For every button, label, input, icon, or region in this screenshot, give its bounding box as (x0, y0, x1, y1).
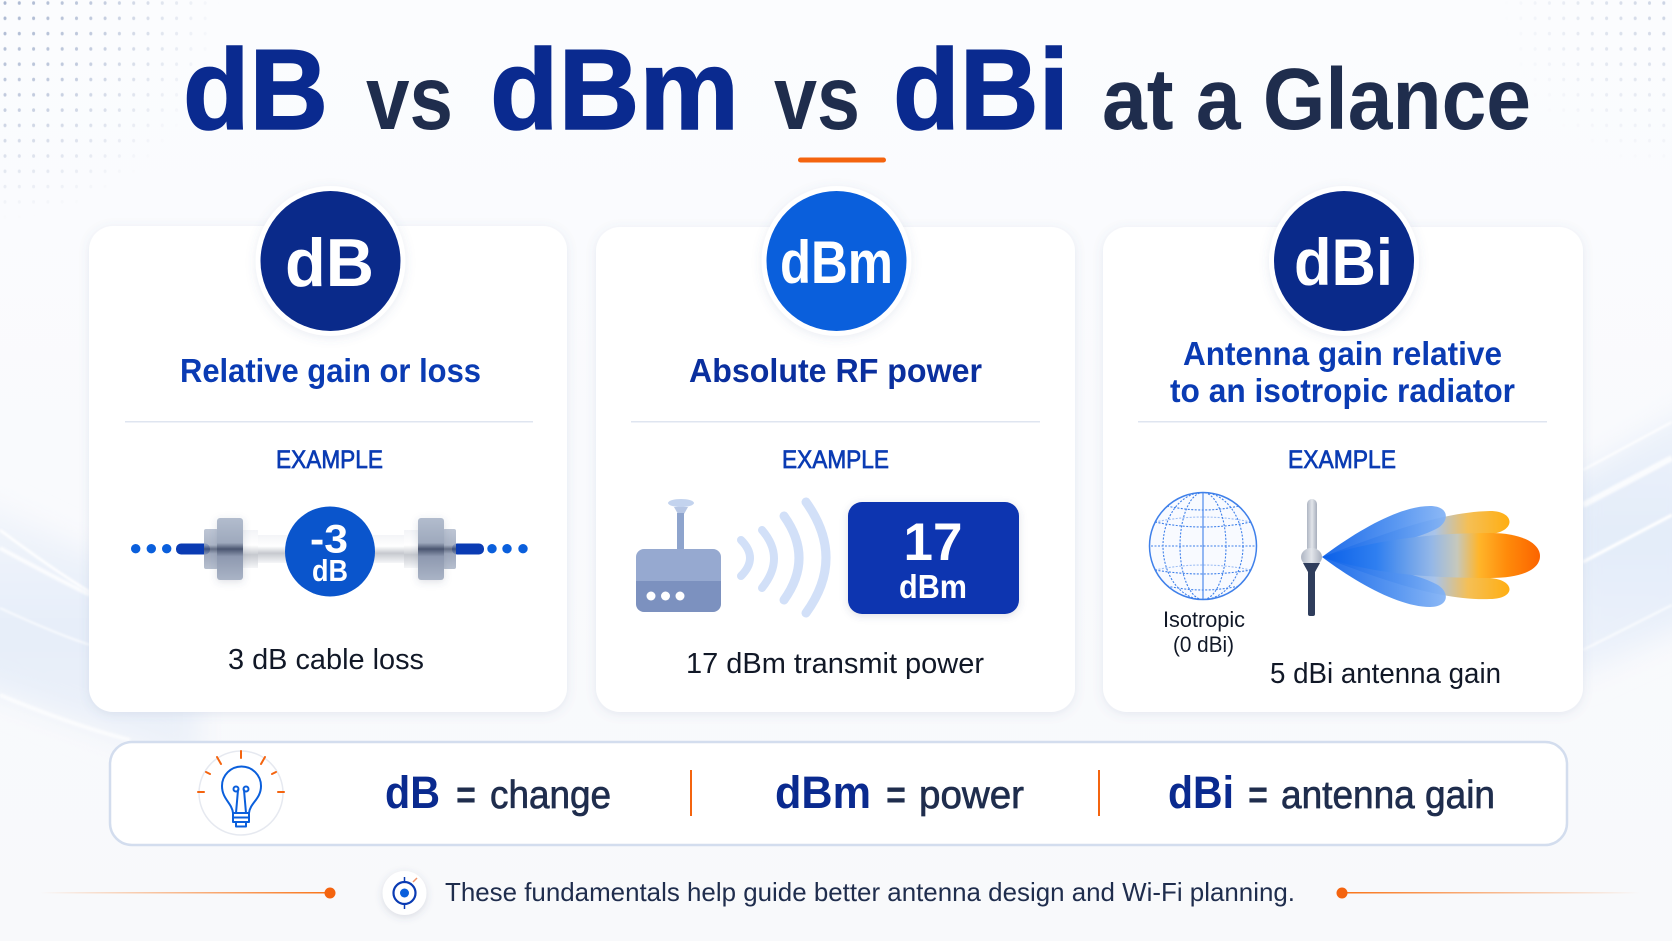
footer accent: left line (40, 888, 336, 898)
background (0, 1, 1672, 740)
badge: dBi: dBi (1294, 225, 1393, 299)
title (183, 27, 1531, 154)
label: isotropic: (0 dBi) (1173, 632, 1234, 657)
badge: dBi (1269, 186, 1419, 336)
formula: dBm = power (775, 767, 1024, 818)
formula: dBi = antenna gain: = (1248, 773, 1268, 817)
icon: isotropic sphere (1150, 492, 1256, 600)
formula: dBi = antenna gain (1168, 767, 1495, 818)
illustration: coax cable with -3 dB attenuator: -3 (310, 518, 348, 562)
formula: dBi = antenna gain: antenna gain (1281, 774, 1495, 817)
title: dBi (893, 27, 1069, 154)
panel: dBi card (1103, 186, 1583, 712)
title: at a Glance (1102, 51, 1531, 148)
label: isotropic: Isotropic (1163, 607, 1245, 632)
caption: 5 dBi antenna gain (1270, 658, 1501, 690)
formula: dBm = power: power (919, 774, 1024, 817)
formula: dB = change (385, 767, 611, 818)
heading: to an isotropic radiator (1170, 372, 1515, 409)
badge: dB (256, 186, 406, 336)
title: vs (366, 48, 453, 149)
panel: dB card (89, 186, 567, 712)
title: dB (183, 27, 328, 154)
formula: dBm = power: dBm (775, 767, 871, 818)
icon: directional antenna pattern (1301, 499, 1540, 616)
example label: EXAMPLE (276, 446, 383, 474)
caption: 3 dB cable loss (228, 644, 424, 676)
heading: Absolute RF power (689, 352, 982, 389)
value box: 17 dBm: 17 (904, 513, 962, 572)
formula: dB = change: change (490, 774, 611, 817)
card body (89, 226, 567, 712)
formula: dBm = power: = (886, 773, 906, 817)
card body (596, 227, 1075, 712)
card body (1103, 227, 1583, 712)
value box: 17 dBm (848, 502, 1019, 614)
example label: EXAMPLE (782, 446, 889, 474)
footer note: These fundamentals help guide better antenna design and Wi-Fi planning. (445, 877, 1295, 907)
example label: EXAMPLE (1288, 446, 1396, 474)
title: dBm (490, 27, 739, 154)
formula: dBi = antenna gain: dBi (1168, 767, 1234, 818)
formula: dB = change: dB (385, 767, 440, 818)
title: vs (774, 48, 860, 149)
heading: Antenna gain relative (1183, 335, 1502, 372)
illustration: coax cable with -3 dB attenuator: dB (312, 553, 348, 588)
badge: dBm: dBm (780, 229, 893, 296)
heading: Relative gain or loss (180, 352, 481, 389)
formula: dB = change: = (456, 773, 476, 817)
badge: dBm (762, 186, 912, 336)
icon: light bulb (198, 751, 284, 835)
value box: 17 dBm: dBm (899, 568, 967, 605)
panel: dBm card (596, 186, 1075, 712)
illustration: coax cable with -3 dB attenuator (131, 506, 528, 596)
icon: target (382, 871, 426, 915)
icon: router with signal waves (636, 499, 826, 613)
label: isotropic (1163, 607, 1245, 657)
footer accent: right line (1336, 888, 1640, 898)
heading (1170, 335, 1515, 409)
caption: 17 dBm transmit power (686, 648, 984, 680)
summary bar (110, 742, 1567, 845)
title underline (798, 158, 886, 162)
badge: dB: dB (285, 225, 374, 301)
